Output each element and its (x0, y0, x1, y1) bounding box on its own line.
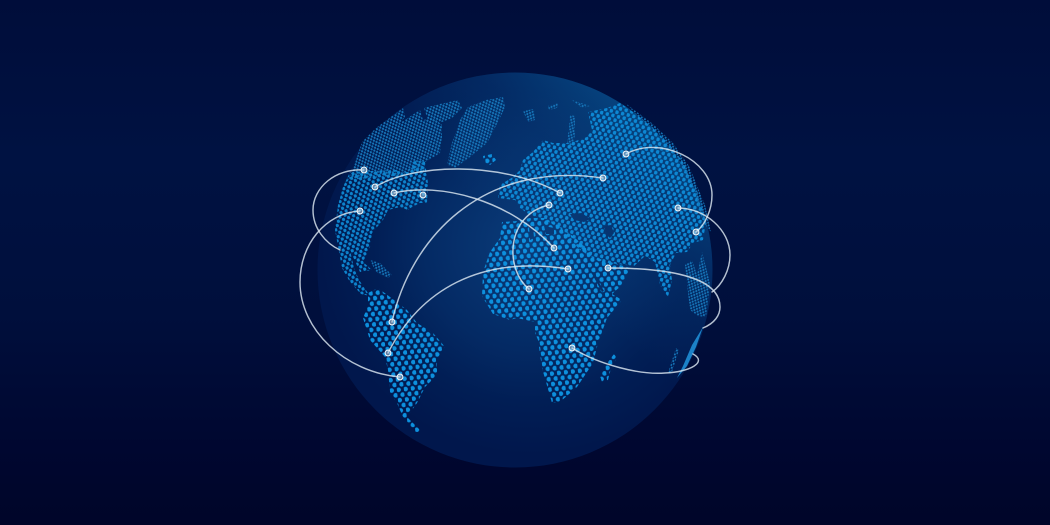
continent: Madagascar (600, 354, 617, 382)
continent: South America (363, 288, 445, 432)
continent: Iceland (483, 154, 496, 165)
continent: Arctic Canada islands (424, 100, 462, 122)
continent: Australia limb (677, 327, 703, 378)
continent: Far East limb (625, 103, 711, 232)
continent: Indonesia (668, 348, 679, 373)
map: dotted continents (335, 97, 711, 432)
network arcs (300, 147, 730, 377)
continent: Caribbean (370, 260, 392, 278)
network nodes (357, 151, 699, 380)
continent: Eurasia (498, 103, 706, 297)
globe sphere (318, 72, 712, 468)
continent: Greenland (447, 97, 505, 168)
continent: North America north (348, 108, 442, 180)
continent: Southeast Asia (685, 252, 710, 317)
continent: North America south (335, 160, 428, 272)
continent: Novaya Zemlya (567, 115, 575, 148)
continent: Africa (482, 218, 630, 403)
continent: Central America (340, 250, 370, 296)
continent: northern islands (523, 100, 590, 122)
